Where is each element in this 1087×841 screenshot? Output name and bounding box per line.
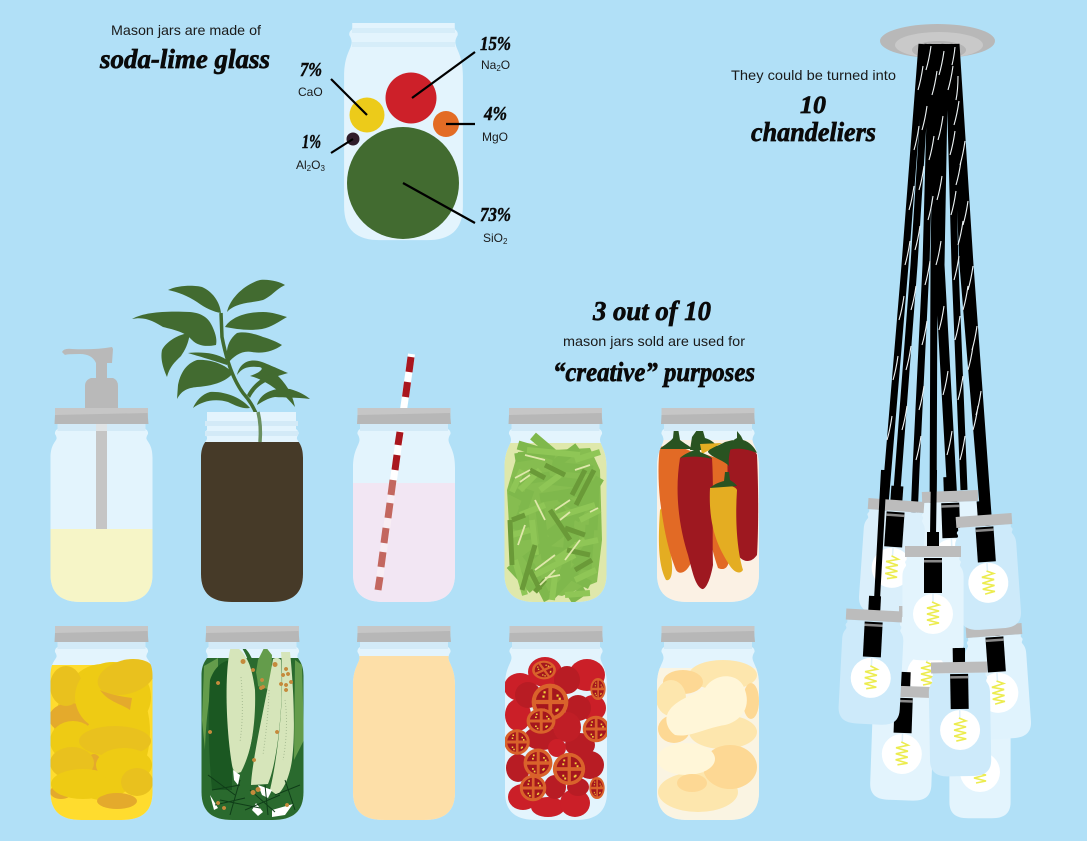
jar: potatoes — [656, 626, 760, 823]
label: SiO2 73%: 73% — [480, 204, 511, 226]
heading: creative purposes: mason jars sold are used for — [563, 333, 745, 349]
jar lamp 6 — [962, 609, 1032, 741]
heading: chandeliers — [731, 67, 896, 147]
cable to lamp 7 — [955, 648, 965, 665]
chandelier — [838, 24, 1032, 818]
label: MgO 4%: 4% — [483, 103, 507, 125]
label: Al2O3 1%: 1% — [302, 131, 321, 153]
heading: soda-lime glass — [99, 22, 270, 74]
jar lamp 10 — [896, 592, 958, 720]
back bundle of cables — [877, 44, 997, 665]
label: SiO2 73%: 2 — [503, 237, 508, 246]
heading: creative purposes — [553, 296, 755, 387]
heading: creative purposes: 3 out of 10 — [592, 296, 711, 326]
jar: soap pump — [50, 347, 154, 604]
jar: peppers — [656, 408, 760, 604]
heading: chandeliers: chandeliers — [751, 117, 876, 147]
label: MgO 4%: MgO — [482, 130, 508, 144]
ceiling rose — [880, 24, 995, 59]
label: Na2O 15%: O — [501, 58, 510, 72]
jar: tomatoes — [504, 626, 609, 820]
label: CaO 7% — [298, 59, 323, 99]
glass and soil — [200, 412, 304, 604]
jar: plant in soil — [132, 280, 310, 604]
label: Na2O 15%: 2 — [496, 64, 501, 73]
label: Al2O3 1%: Al — [296, 158, 307, 172]
jar: green beans — [504, 408, 608, 604]
jar lamp 5 — [838, 594, 906, 726]
jar lamp 3 — [902, 532, 964, 660]
leaves — [132, 280, 310, 408]
label: Na2O 15% — [480, 33, 511, 73]
jar lamp 1 — [858, 484, 928, 616]
label: Na2O 15%: 15% — [480, 33, 511, 55]
heading: soda-lime glass: Mason jars are made of — [111, 22, 261, 38]
glass composition jar chart — [331, 23, 475, 240]
jar: pink drink with straw — [353, 354, 456, 604]
label: MgO 4% — [482, 103, 508, 144]
jar lamp 8 — [870, 671, 935, 801]
heading: chandeliers: 10 — [800, 92, 827, 119]
heading: creative purposes: “creative” purposes — [553, 357, 755, 387]
heading: soda-lime glass: soda-lime glass — [99, 44, 270, 74]
heading: chandeliers: They could be turned into — [731, 67, 896, 83]
label: CaO 7%: CaO — [298, 85, 323, 99]
jar lamp 4 — [952, 499, 1022, 631]
label: Al2O3 1%: O — [311, 158, 320, 172]
jar lamp 2 — [919, 476, 984, 606]
label: SiO2 73%: SiO — [483, 231, 503, 245]
jar: peach milk — [353, 626, 456, 822]
jar lamp 9 — [949, 690, 1011, 818]
label: Al2O3 1% — [296, 131, 325, 173]
label: SiO2 73% — [480, 204, 511, 246]
label: Al2O3 1%: 3 — [320, 164, 325, 173]
label: CaO 7%: 7% — [300, 59, 322, 81]
label: Al2O3 1%: 2 — [307, 164, 312, 173]
jar lamp 7 — [928, 647, 991, 777]
label: Na2O 15%: Na — [481, 58, 496, 72]
jar: pickles — [200, 626, 305, 822]
cable to front lamp — [877, 470, 934, 600]
jar: peaches — [49, 626, 158, 823]
